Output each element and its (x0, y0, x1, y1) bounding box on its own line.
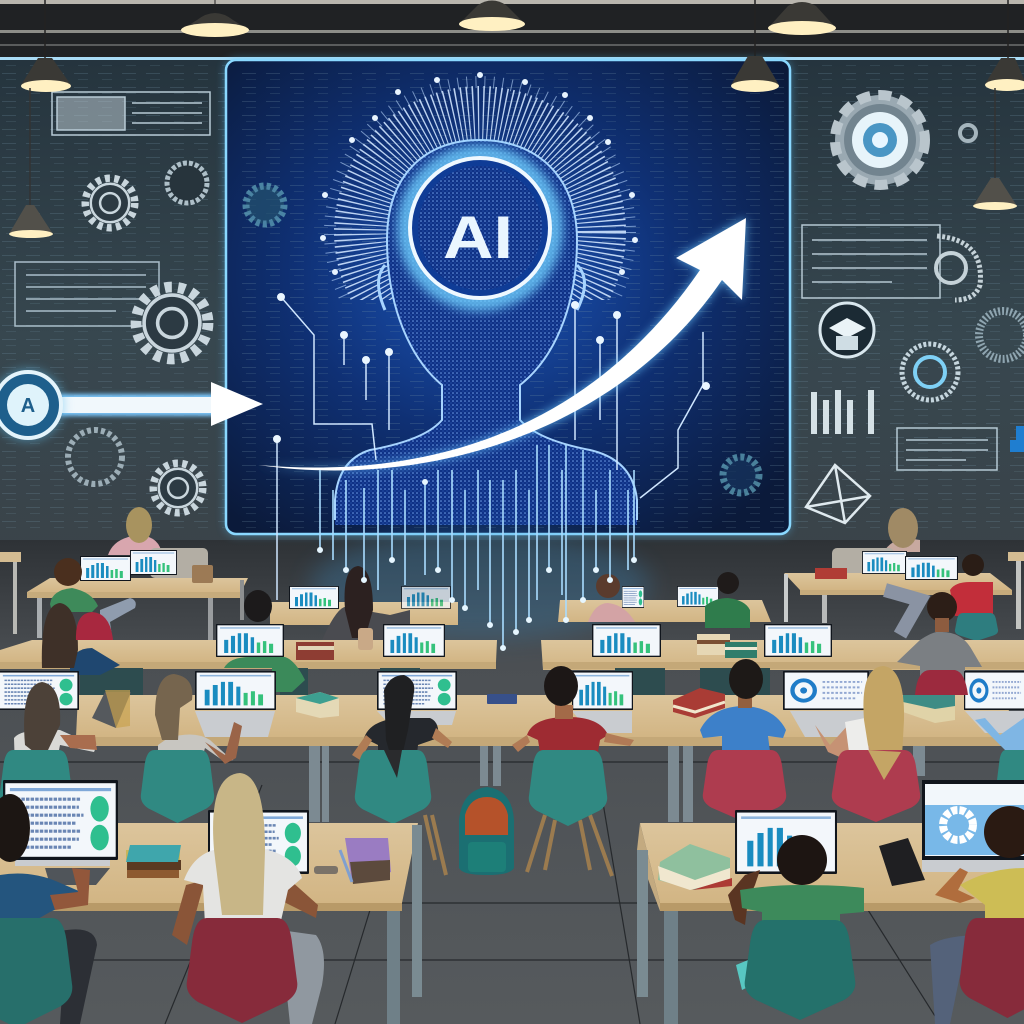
lamp (973, 88, 1017, 210)
gear icon (85, 178, 135, 228)
AI head figure (277, 75, 706, 600)
keyboard (45, 868, 110, 885)
network icon (806, 465, 870, 523)
input badge: A (21, 395, 35, 417)
dial icon (902, 344, 958, 400)
row 3 boy in grey (897, 592, 982, 692)
row 3 screens (216, 624, 832, 657)
back row: left group (0, 507, 248, 640)
student long hair (322, 566, 410, 640)
tablet (879, 838, 925, 886)
front desk items (126, 838, 925, 890)
small teal gears on panel (246, 186, 759, 493)
lamp (21, 0, 71, 92)
lower clutter (80, 668, 770, 695)
row 2 student: boy red (512, 666, 634, 752)
ray end dots (323, 75, 635, 272)
satchel (192, 565, 213, 583)
hair over chair (868, 750, 901, 780)
front student: blonde girl (172, 773, 324, 1024)
desk (558, 600, 771, 622)
row 2 student: girl brown hair (155, 674, 243, 765)
book stack (673, 688, 725, 718)
right wall graphics (802, 95, 1024, 523)
student green (705, 572, 750, 628)
text card (802, 225, 940, 298)
laptops (80, 556, 131, 581)
screen (383, 624, 445, 657)
pendant lamps (9, 0, 1024, 238)
small book (487, 694, 517, 704)
monitor right (922, 780, 1024, 872)
row 2 student: right edge (975, 718, 1024, 750)
laptop (905, 556, 958, 580)
cup (358, 628, 373, 650)
chair (141, 750, 214, 823)
note card (897, 428, 997, 470)
student in pink (108, 507, 162, 555)
monitor (3, 780, 118, 860)
chair (529, 750, 607, 826)
chair (955, 613, 998, 641)
lamp (181, 0, 249, 37)
row 3 books and cup (296, 628, 757, 660)
legs (885, 590, 920, 635)
student in red (950, 554, 993, 616)
third back group (244, 566, 458, 640)
chair legs (425, 815, 612, 876)
legs (280, 930, 324, 1024)
wall texture (0, 62, 1024, 532)
crimson far chair (915, 670, 968, 695)
book stack (725, 642, 757, 658)
dial icon (68, 430, 122, 484)
front left desk (0, 823, 422, 1024)
front monitors (3, 780, 1024, 885)
dripping data lines (320, 445, 634, 648)
row 3 desks (0, 640, 1024, 695)
screen (592, 624, 661, 657)
lamp (985, 0, 1024, 91)
red box (815, 568, 847, 579)
front chair teal left (0, 918, 72, 1024)
student pink (588, 574, 635, 622)
legs (930, 935, 985, 1024)
grey chair back (832, 548, 894, 576)
ring icon (167, 163, 207, 203)
target gear icon (136, 287, 208, 359)
front student: blue shirt left (0, 794, 97, 1024)
ring icon (979, 311, 1024, 359)
lamp (9, 88, 53, 238)
front student: yellow shirt (930, 806, 1024, 1024)
book stack (658, 844, 732, 890)
row 2 student: girl white shirt (14, 682, 97, 770)
teal sock (736, 960, 752, 990)
desk (270, 602, 458, 625)
front right desk (637, 823, 1024, 1024)
keyboard bases (195, 711, 1024, 737)
fourth back group (558, 572, 771, 628)
backpack (459, 787, 514, 875)
chair (832, 750, 920, 822)
laptop (289, 586, 339, 609)
large gear (835, 95, 925, 185)
eraser (314, 866, 338, 874)
radiating rays (324, 76, 636, 300)
row 3 student green torso (224, 657, 305, 692)
central glowing panel (226, 60, 790, 534)
small ring (960, 125, 976, 141)
left wall graphics (15, 92, 210, 513)
chair (997, 750, 1024, 800)
graduation icon (820, 303, 874, 357)
gear badge (153, 463, 203, 513)
laptop (208, 810, 309, 874)
row 2 student: dark ponytail (352, 675, 452, 778)
chair (703, 750, 786, 822)
legs (45, 929, 97, 1024)
student blonde (885, 508, 920, 552)
row 2 student: boy blue (700, 659, 786, 752)
screen (783, 671, 869, 710)
row 2 items (92, 688, 955, 728)
screen (764, 624, 832, 657)
chair (355, 750, 431, 824)
book stack (697, 634, 730, 655)
laptop (130, 550, 177, 575)
legs (309, 746, 925, 822)
grey chair back (150, 548, 208, 578)
book stack (296, 692, 339, 718)
leg (387, 911, 400, 1024)
circuit lines (277, 297, 703, 600)
maroon chair far (76, 612, 113, 640)
head outline (335, 140, 637, 520)
right desk (541, 640, 1024, 670)
tablet (92, 692, 131, 728)
student dark (244, 590, 272, 622)
panel light spill (310, 530, 650, 640)
laptop (677, 586, 719, 607)
front chair crimson right (960, 918, 1024, 1018)
screen (195, 671, 276, 710)
laptops (862, 551, 907, 574)
ear hints (378, 265, 584, 310)
row 2 student: blonde right (815, 666, 904, 780)
leg (664, 911, 678, 1024)
leg (412, 825, 422, 997)
far right table (1008, 552, 1024, 629)
book stack (903, 695, 955, 723)
input arrow (0, 369, 263, 441)
chart card (52, 92, 210, 135)
floor (0, 540, 1024, 1024)
book stack (126, 845, 181, 878)
front chair teal right (745, 920, 855, 1020)
halo ring (406, 154, 554, 302)
front chair crimson (187, 918, 297, 1023)
back row: right group (784, 508, 1024, 641)
row 2 chairs (0, 750, 1024, 876)
row 2 desk (76, 695, 1024, 822)
blue glyph (1010, 426, 1024, 452)
ceiling (0, 0, 1024, 60)
hair over chair (384, 750, 402, 778)
far left table (0, 552, 21, 634)
screen (964, 671, 1024, 710)
front student: green shirt (728, 835, 864, 930)
text card (15, 262, 159, 326)
laptop faded (401, 586, 451, 609)
desk (27, 578, 248, 640)
leg (637, 850, 648, 997)
bar icons (814, 390, 871, 434)
left desk (0, 640, 497, 669)
screen (572, 671, 633, 710)
row 3 girl left (42, 603, 120, 675)
wall background (0, 0, 1024, 560)
head and shoulders silhouette (335, 140, 637, 525)
purple book stack (340, 838, 391, 884)
desk (784, 573, 1012, 623)
AI badge (410, 158, 550, 298)
laptop (622, 586, 644, 608)
boy in green (50, 558, 136, 636)
lamp (459, 0, 525, 31)
growth arrow (258, 218, 746, 470)
row 2 screens (0, 671, 1024, 737)
swirl icon (936, 236, 980, 300)
screen (377, 671, 457, 710)
input badge (0, 369, 64, 441)
lamp (731, 0, 779, 92)
laptop (735, 810, 837, 874)
AI label: AI (443, 204, 513, 271)
lamp (768, 2, 836, 35)
